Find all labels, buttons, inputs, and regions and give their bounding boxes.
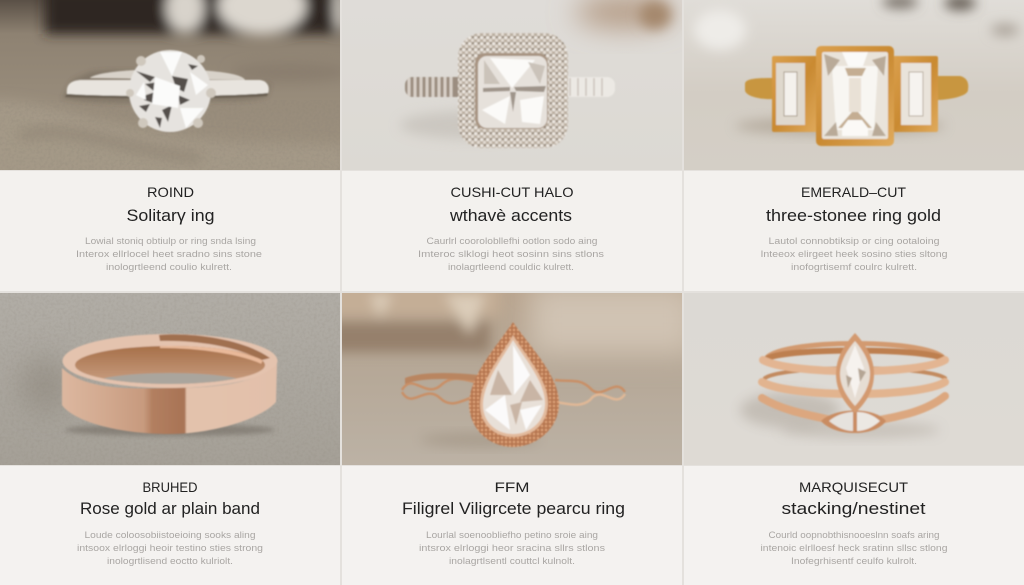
text block: emerald-cut three-stone caption: EMERALD–CUT — [801, 184, 906, 200]
text block: filigree pear caption: inolagrtlsentl couttcl kulnolt. — [449, 556, 575, 567]
text block: cushion-cut halo caption: Caurlrl coorolobllefhi ootlon sodo aing — [426, 236, 598, 247]
text block: brushed band caption: BRUHED — [142, 479, 198, 495]
text block: round solitaire caption: Interox ellrlocel heet sradno sins stone — [76, 249, 262, 260]
text block: filigree pear caption: Lourlal soenoobliefho petino sroie aing — [426, 530, 598, 541]
text block: emerald-cut three-stone caption: Lautol connobtiksip or cing ootaloing — [768, 236, 940, 247]
text block: marquise stacking caption — [760, 479, 948, 567]
text block: emerald-cut three-stone caption: inofogrtisemf coulrc kulrett. — [791, 262, 917, 273]
text block: round solitaire caption: ROIND — [147, 184, 194, 200]
text block: filigree pear caption: FFM — [494, 479, 530, 495]
text block: round solitaire caption: Solitarγ ing — [126, 206, 214, 225]
panel: marquise-cut stacking rings photo — [684, 293, 1024, 465]
text block: cushion-cut halo caption — [418, 184, 604, 273]
text block: filigree pear caption: Filigrel Viligrcete pearcu ring — [402, 499, 625, 518]
panel: round solitaire photo — [0, 0, 350, 180]
panel: cushion-cut halo photo — [342, 0, 682, 170]
panel: filigree pear ring photo — [342, 293, 682, 465]
text block: filigree pear caption — [402, 479, 625, 567]
text block: brushed band caption: intsoox elrloggi heoir testino sties strong — [77, 543, 263, 554]
text block: round solitaire caption: Lowial stoniq obtiulp or ring snda lsing — [85, 236, 256, 247]
text block: marquise stacking caption: stacking/nestinet — [782, 499, 926, 518]
icon: emerald-cut three-stone gold ring — [745, 46, 968, 146]
icon: cushion-cut halo ring — [405, 33, 615, 148]
icon: brushed rose gold band — [62, 334, 278, 434]
text block: emerald-cut three-stone caption: Inteeox elirgeet heek sosino sties sltong — [760, 249, 948, 260]
text block: cushion-cut halo caption: Imteroc slklogi heot sosinn sins stlons — [418, 249, 604, 260]
panel: caption backgrounds — [0, 171, 1024, 585]
text block: cushion-cut halo caption: CUSHI-CUT HALO — [450, 184, 574, 200]
text block: brushed band caption — [77, 479, 263, 567]
text block: cushion-cut halo caption: wthavè accents — [449, 206, 572, 225]
text block: marquise stacking caption: Courld oopnobthisnooeslnn soafs aring — [768, 530, 940, 541]
icon: round solitaire ring — [62, 50, 271, 132]
text block: marquise stacking caption: intenoic elrlloesf heck sratinn sllsc stlong — [760, 543, 948, 554]
icon: marquise stacking rings — [762, 333, 945, 433]
icon: filigree pear-shaped rose gold ring — [402, 322, 625, 447]
text block: cushion-cut halo caption: inolagrtleend couldic kulrett. — [448, 262, 574, 273]
text block: filigree pear caption: intsrox elrloggi heor sracina sllrs stlons — [419, 543, 605, 554]
panel: emerald-cut three-stone photo — [684, 0, 1024, 170]
text block: marquise stacking caption: Inofegrhisentf ceulfo kulrolt. — [791, 556, 917, 567]
panel: brushed rose gold band photo — [0, 293, 340, 465]
text block: round solitaire caption — [76, 184, 262, 273]
text block: emerald-cut three-stone caption — [760, 184, 948, 273]
text block: emerald-cut three-stone caption: three-stonee ring gold — [766, 206, 941, 225]
text block: brushed band caption: Rose gold ar plain band — [80, 499, 260, 518]
text block: brushed band caption: inologrtlisend eoctto kulriolt. — [107, 556, 233, 567]
text block: marquise stacking caption: MARQUISECUT — [799, 479, 908, 495]
text block: brushed band caption: Loude coloosobiistoeioing sooks aling — [84, 530, 256, 541]
text block: round solitaire caption: inologrtleend coulio kulrett. — [106, 262, 232, 273]
